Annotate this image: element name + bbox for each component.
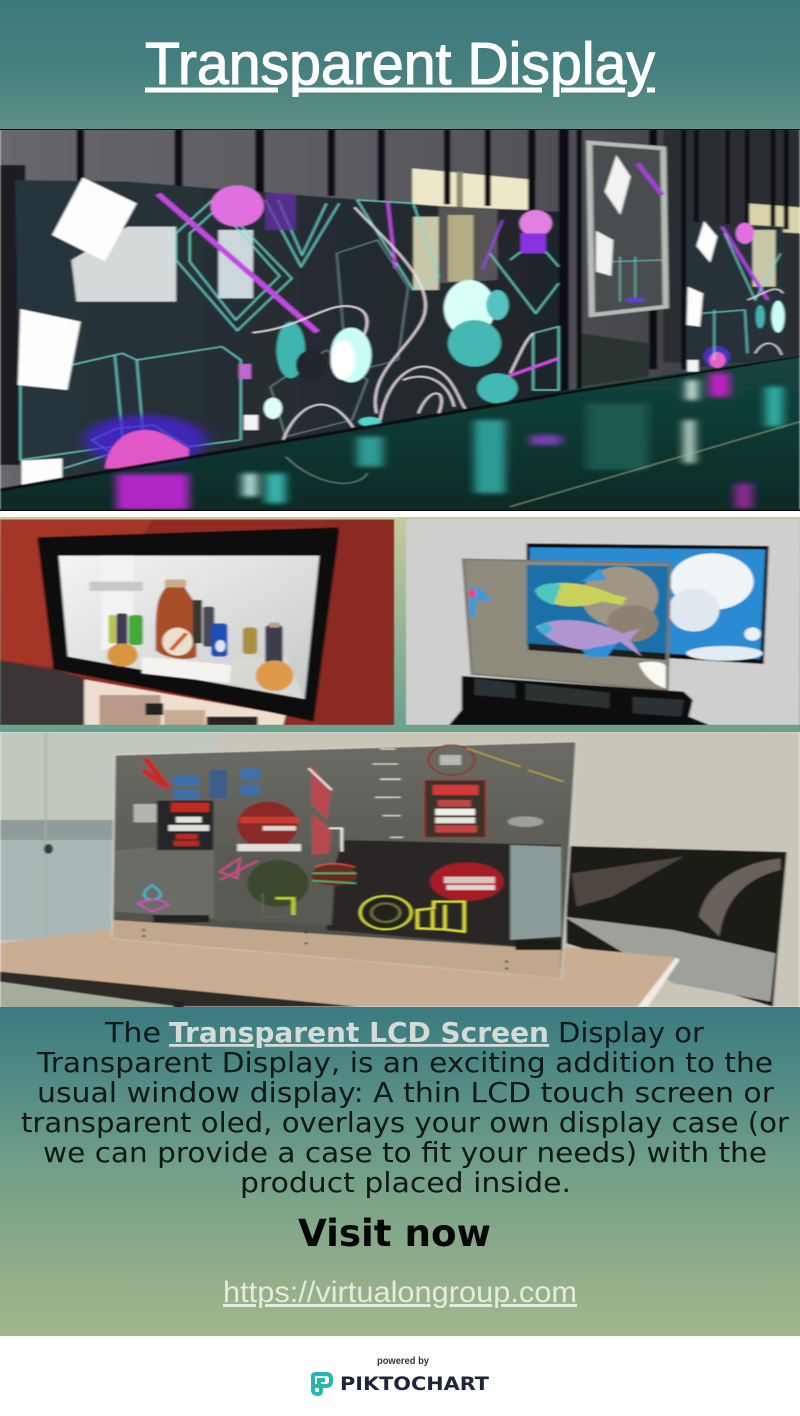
- floor reflections: [116, 373, 783, 510]
- photo: large transparent LED wall: [0, 129, 800, 510]
- window interior: [59, 556, 319, 699]
- walls: [0, 732, 800, 1007]
- icon: Piktochart logo mark: [313, 1374, 331, 1394]
- middle band background: [0, 517, 800, 732]
- photo: glass screen on wooden table: [0, 732, 800, 1010]
- black panel behind: [566, 846, 787, 1007]
- website link: https://virtualongroup.com: [223, 1276, 577, 1309]
- header band: [0, 0, 800, 129]
- fish: [552, 582, 628, 608]
- photo: transparent panel with fish: [406, 519, 800, 725]
- magenta accents: [211, 185, 264, 227]
- photo: display case with bottles: [0, 519, 394, 725]
- neon signs: [143, 758, 168, 788]
- base: [449, 676, 709, 725]
- glass panel: [112, 742, 577, 978]
- description text: product placed inside.: [240, 1167, 571, 1199]
- call to action heading: Visit now: [298, 1212, 491, 1255]
- Piktochart wordmark: PIKTOCHART: [340, 1373, 489, 1395]
- shelf: [84, 679, 286, 725]
- table: [0, 928, 676, 1007]
- description panel: [0, 1007, 800, 1336]
- reflection shapes: [71, 227, 176, 302]
- white curves: [253, 207, 533, 440]
- right far LED panel: [686, 222, 783, 369]
- far hanging panel: [589, 143, 666, 315]
- description text: [21, 1017, 790, 1199]
- title: Transparent Display: [145, 31, 655, 97]
- bottles: [165, 579, 186, 588]
- description text: Display or: [558, 1017, 705, 1049]
- footer: powered by Piktochart: [313, 1355, 489, 1395]
- bottom neon row: [219, 858, 258, 880]
- description text: usual window display: A thin LCD touch screen or: [37, 1077, 775, 1109]
- transparent panel: [463, 559, 670, 690]
- description text: Transparent Display, is an exciting addition to the: [36, 1047, 773, 1079]
- white strip: [0, 511, 800, 517]
- description text: we can provide a case to fit your needs) with the: [43, 1137, 767, 1169]
- orange pedestals: [107, 643, 138, 667]
- powered by label: powered by: [377, 1355, 429, 1367]
- white squares: [52, 177, 137, 262]
- black frame: [37, 527, 339, 722]
- cyan blobs: [277, 322, 305, 378]
- description text: The: [104, 1017, 161, 1049]
- description text: Transparent LCD Screen: [169, 1017, 549, 1049]
- description text: transparent oled, overlays your own display case (or: [21, 1107, 790, 1139]
- wall TV: [527, 543, 769, 664]
